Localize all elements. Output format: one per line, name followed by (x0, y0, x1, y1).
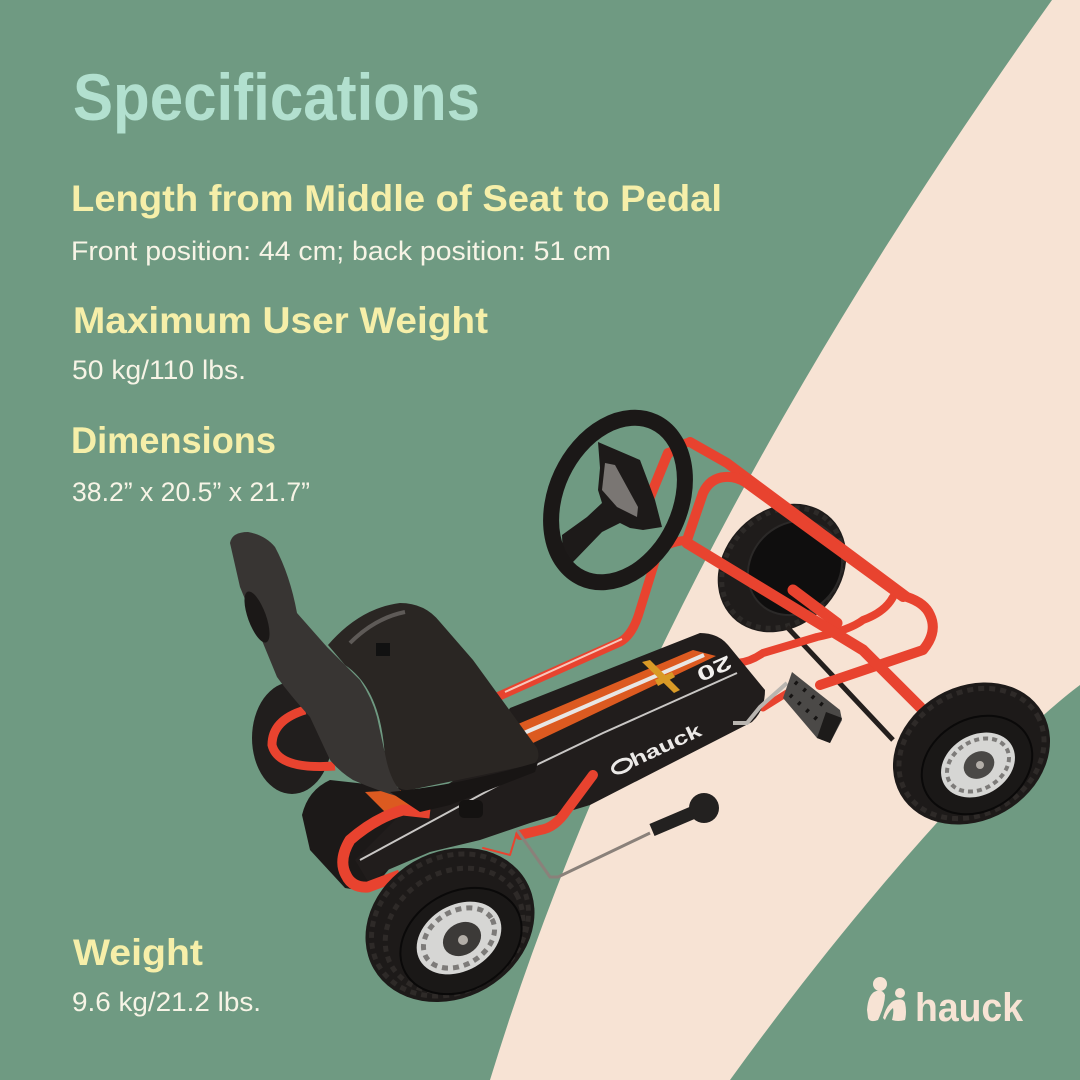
tyre (867, 654, 1076, 853)
value: 38.2” x 20.5” x 21.7” (72, 477, 310, 507)
deck body (355, 633, 765, 885)
deck number: 20 (693, 650, 735, 685)
hand brake lever (517, 793, 719, 877)
front tie rod (787, 627, 893, 740)
heading: Maximum User Weight (73, 300, 488, 341)
seat lower shell (390, 762, 538, 812)
seat back (230, 532, 400, 797)
pedal (733, 672, 842, 743)
seat clip (376, 643, 390, 656)
axle nut (458, 935, 468, 945)
seat highlight (350, 612, 405, 643)
spokes (562, 442, 662, 562)
deck hauck logo (610, 720, 706, 776)
title: Specifications (73, 60, 480, 134)
deck white stripe (524, 655, 704, 733)
value: Front position: 44 cm; back position: 51 cm (71, 236, 611, 266)
red steering frame (483, 442, 933, 855)
tyre tread (345, 826, 555, 1024)
spec: seat to pedal length (71, 178, 722, 266)
far rear wheel (252, 682, 332, 794)
logo text: hauck (627, 720, 706, 772)
hub slots (937, 728, 1019, 802)
logo icon (867, 977, 906, 1021)
background: cream curved band (490, 0, 1080, 1080)
pedal plate (783, 672, 842, 743)
hub centre (437, 915, 487, 963)
rear orange stripe (365, 790, 415, 812)
far front wheel (691, 477, 873, 659)
highlight on steering column (505, 639, 622, 692)
value: 50 kg/110 lbs. (72, 355, 246, 385)
red rear bumper (343, 810, 430, 887)
front right wheel (867, 654, 1076, 853)
chassis adjuster knob (459, 800, 483, 818)
illustration: red and black go-kart (230, 396, 1076, 1032)
centre pad (602, 463, 638, 517)
seat back recess (239, 589, 275, 645)
pedal end (817, 712, 842, 743)
pedal rod (733, 683, 787, 723)
disc (904, 696, 1050, 834)
disc (381, 867, 541, 1015)
spec: maximum user weight (72, 300, 488, 385)
seat base (328, 603, 538, 790)
deck side trim line (360, 673, 737, 860)
heading: Weight (73, 932, 203, 973)
hub centre (959, 746, 999, 784)
hub (929, 720, 1027, 810)
deck orange stripe (518, 650, 716, 743)
steering wheel (525, 396, 711, 604)
knob (689, 793, 719, 823)
lever rod (517, 830, 650, 877)
deck emblem (642, 660, 680, 693)
rear red loop (272, 710, 335, 767)
rear body box (302, 780, 430, 892)
heading: Dimensions (71, 420, 276, 461)
heading: Length from Middle of Seat to Pedal (71, 178, 722, 219)
red side bar (520, 775, 593, 835)
grip (652, 813, 692, 830)
front left wheel (337, 818, 563, 1032)
pedal studs (790, 682, 826, 722)
tyre inner tread (363, 844, 545, 1016)
rim (525, 396, 711, 604)
logo ring (610, 756, 634, 776)
hub slots (413, 896, 505, 980)
tyre tread (875, 663, 1068, 844)
value: 9.6 kg/21.2 lbs. (72, 987, 261, 1017)
hub (404, 887, 514, 989)
axle nut (976, 761, 984, 769)
spec: weight (72, 932, 261, 1017)
brand logo (867, 977, 1024, 1030)
tyre (337, 818, 563, 1032)
spec: dimensions (71, 420, 310, 507)
logo wordmark: hauck (915, 986, 1024, 1030)
